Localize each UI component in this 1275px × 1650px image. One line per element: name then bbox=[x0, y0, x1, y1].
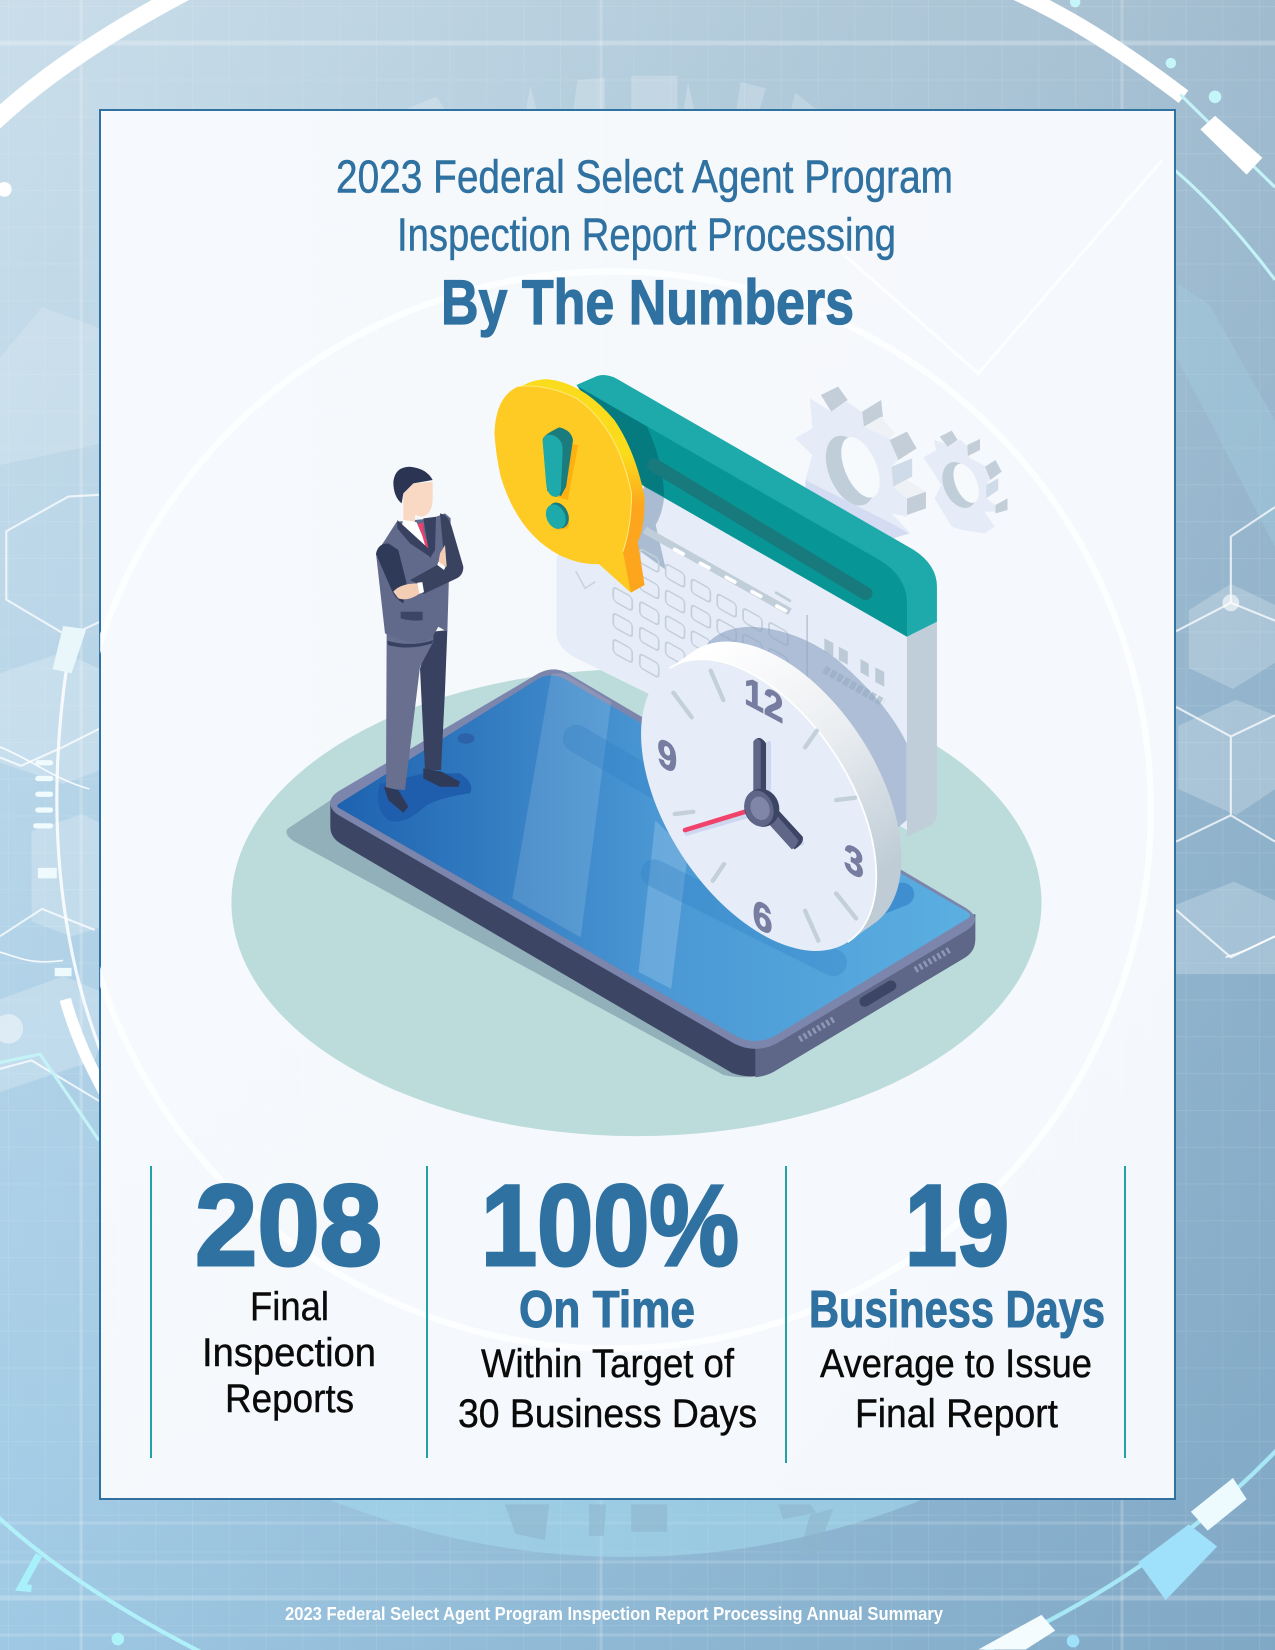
title: By The Numbers bbox=[441, 268, 854, 338]
title: 2023 Federal Select Agent Program bbox=[336, 151, 953, 203]
calendar, gears and speech bubble bbox=[556, 375, 1008, 837]
phone bbox=[330, 669, 975, 1077]
title: Inspection Report Processing bbox=[397, 209, 896, 261]
main white panel bbox=[99, 110, 1176, 1499]
stat: 19 business days: 19 bbox=[905, 1162, 1009, 1290]
stat: 208 final inspection reports: Reports bbox=[225, 1377, 354, 1421]
stat: 19 business days: Final Report bbox=[855, 1392, 1058, 1436]
stat: 100% on time: Within Target of bbox=[481, 1342, 735, 1386]
person in business suit bbox=[376, 467, 471, 822]
speech bubble alert bbox=[494, 379, 645, 593]
stat: 208 final inspection reports: Final bbox=[250, 1285, 329, 1329]
clock: 9 bbox=[657, 729, 677, 783]
calendar body bbox=[556, 375, 937, 837]
gears bbox=[795, 387, 1008, 540]
stat: 208 final inspection reports: Inspection bbox=[202, 1331, 376, 1375]
stat column dividers bbox=[151, 1166, 1125, 1463]
background hexagons bbox=[0, 494, 1275, 1105]
title bbox=[336, 151, 953, 338]
stat: 100% on time bbox=[458, 1162, 757, 1436]
stat: 19 business days bbox=[809, 1162, 1105, 1436]
clock: 12 bbox=[744, 668, 783, 733]
stat: 100% on time: 100% bbox=[481, 1162, 739, 1290]
clock: 3 bbox=[844, 835, 864, 889]
stat: 19 business days: Average to Issue bbox=[820, 1342, 1092, 1386]
phone drop shadow bbox=[286, 797, 766, 1077]
clock: 6 bbox=[753, 891, 772, 945]
stat: 208 final inspection reports: 208 bbox=[195, 1162, 382, 1290]
illustration base ellipse bbox=[231, 669, 1041, 1136]
stat: 100% on time: 30 Business Days bbox=[458, 1392, 757, 1436]
stat: 100% on time: On Time bbox=[519, 1281, 695, 1339]
illustration: phone, clock, calendar, person bbox=[231, 375, 1041, 1136]
panel watermark ring bbox=[100, 631, 1114, 1240]
footer text: 2023 Federal Select Agent Program Inspection Report Processing Annual Summary bbox=[285, 1604, 943, 1624]
stat: 208 final inspection reports bbox=[195, 1162, 382, 1421]
clock bbox=[641, 627, 907, 951]
stat: 19 business days: Business Days bbox=[809, 1281, 1105, 1339]
